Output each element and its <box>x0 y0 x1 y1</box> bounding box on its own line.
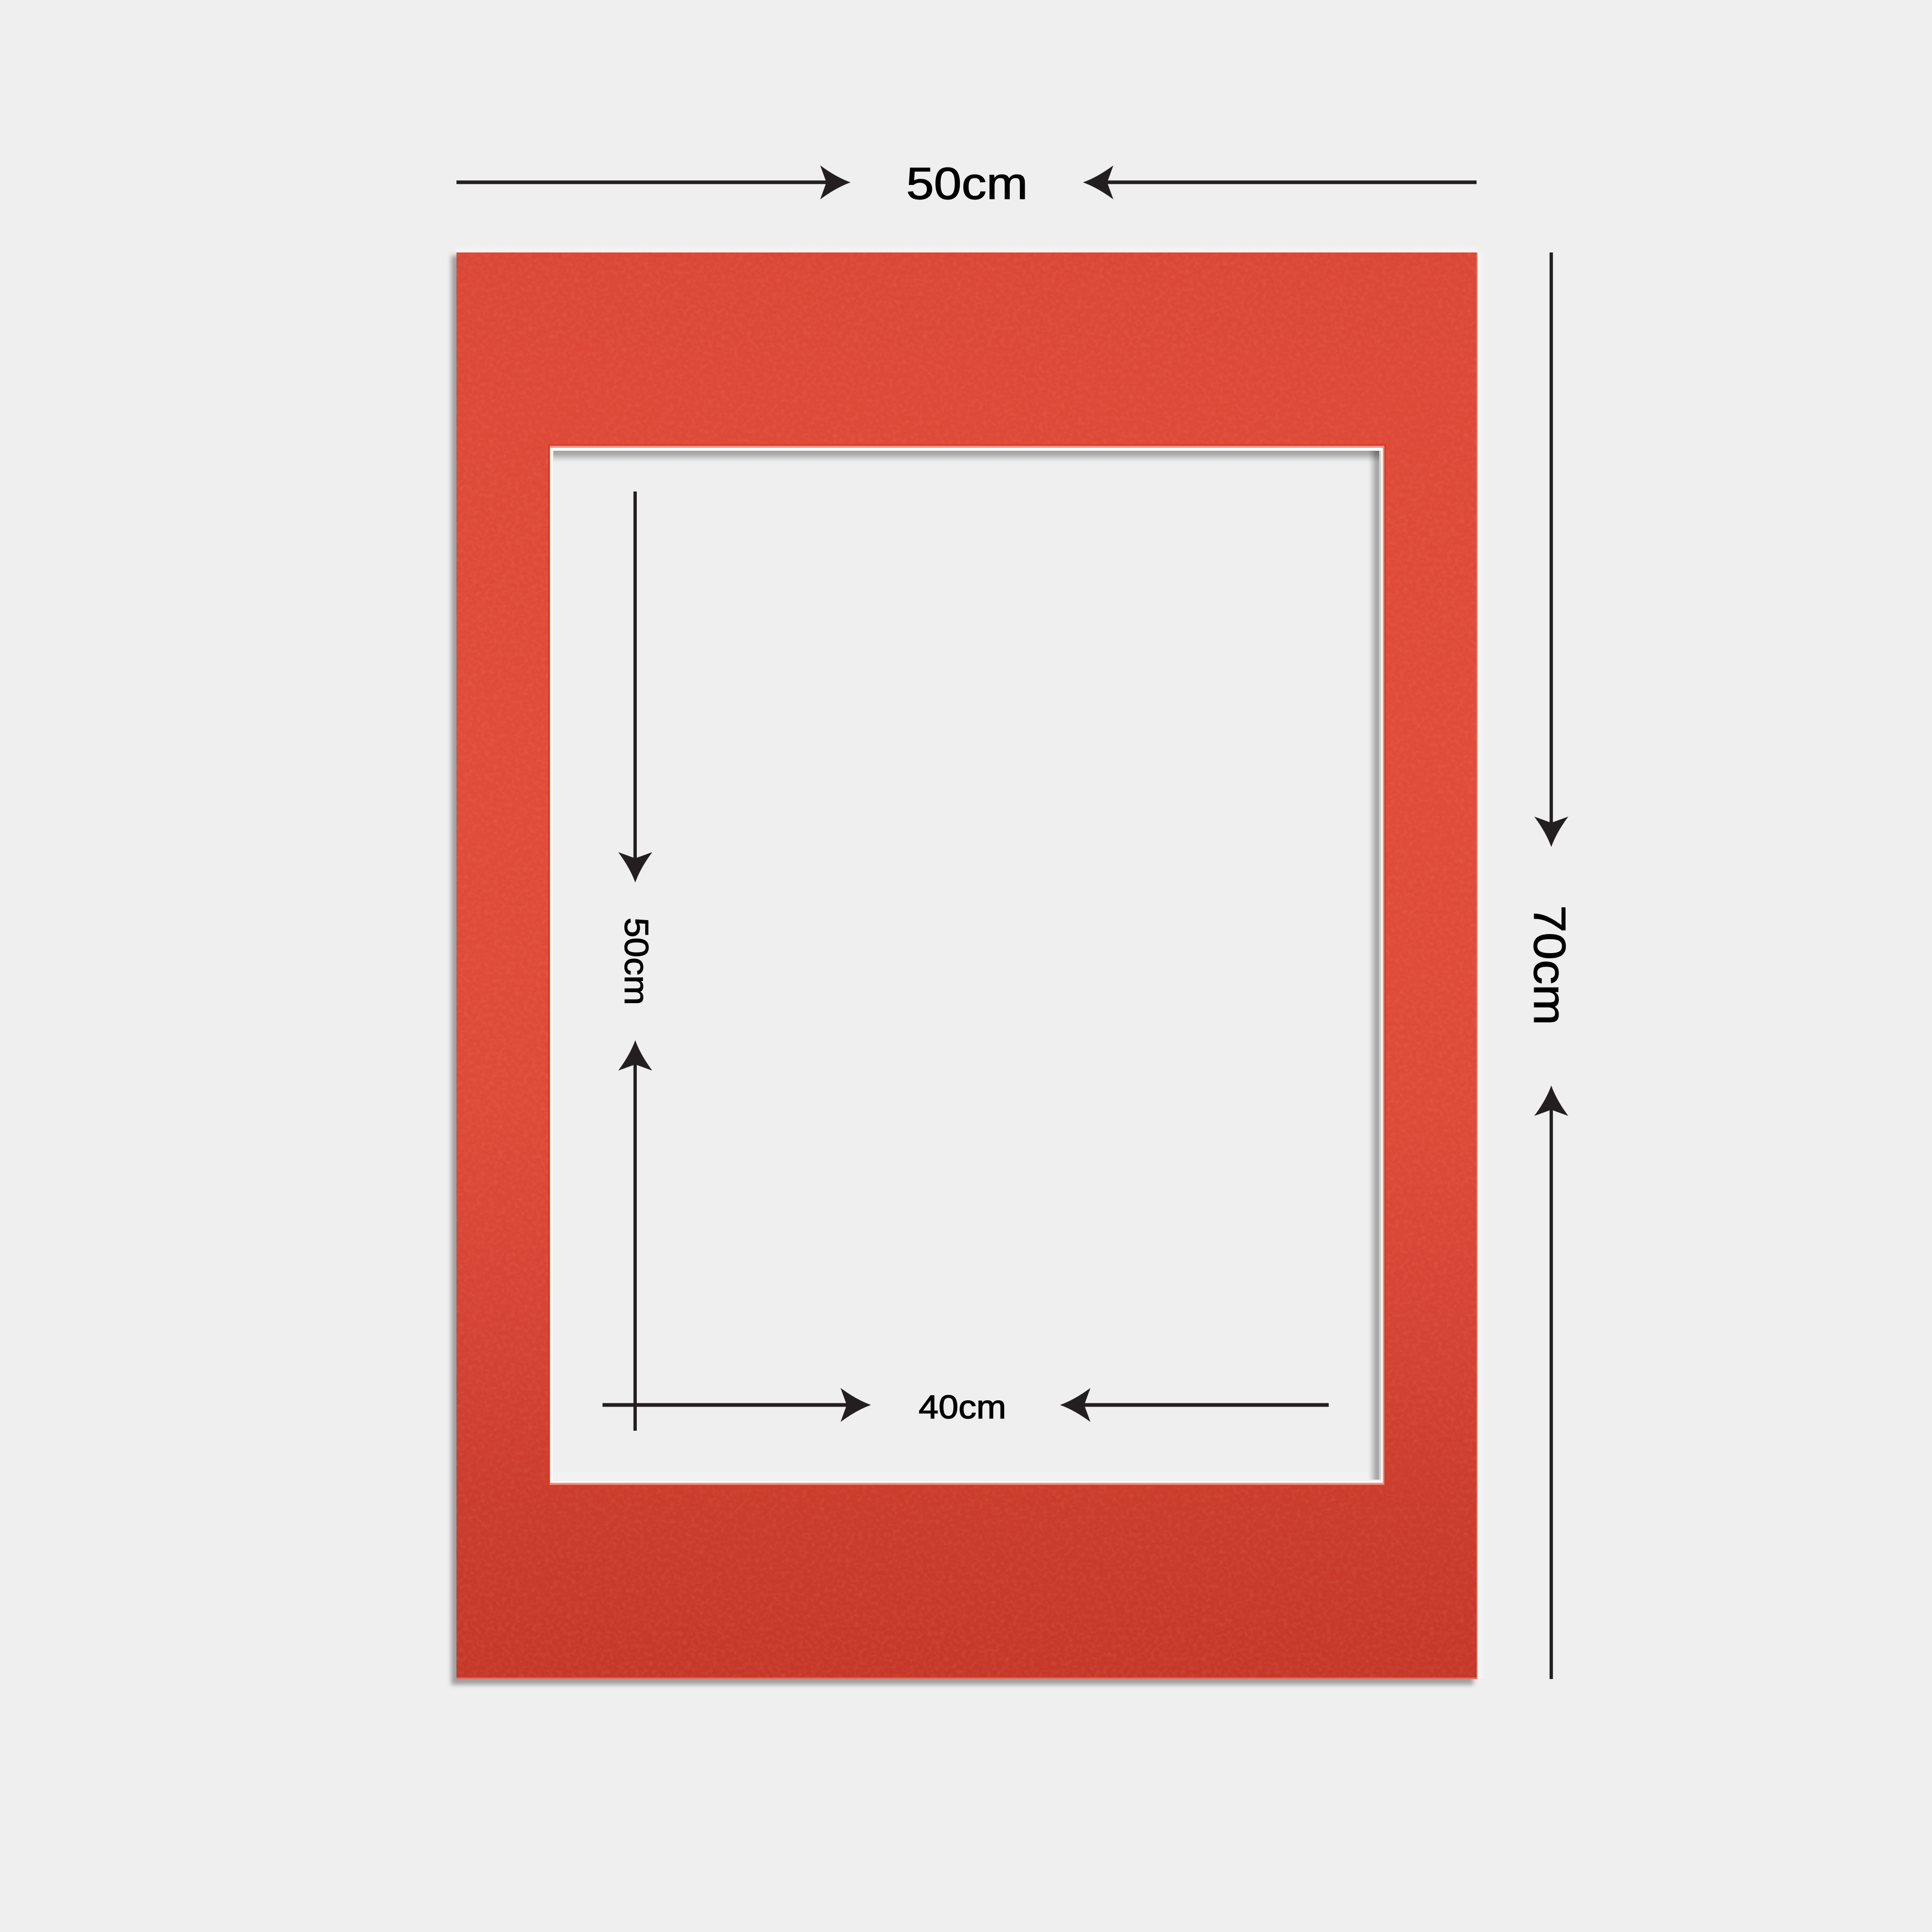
arrow: window width, left <box>603 1388 871 1422</box>
red mount board <box>456 252 1478 1679</box>
window opening <box>553 450 1381 1481</box>
board light halo <box>456 245 1486 1679</box>
label: window width 40cm: 40cm <box>919 1388 1006 1426</box>
board drop shadow <box>451 256 1473 1685</box>
window bevel <box>548 444 1386 1486</box>
arrow: window width, right <box>1060 1388 1329 1422</box>
label: window height 50cm: 50cm <box>618 918 655 1005</box>
label: outer height 70cm: 70cm <box>1524 905 1574 1025</box>
arrow: outer height, bottom <box>1534 1086 1568 1679</box>
arrow: outer height, top <box>1534 252 1568 847</box>
arrow: outer width, right <box>1083 165 1477 199</box>
infographic canvas <box>448 165 1568 1688</box>
arrow: window height, bottom <box>618 1040 652 1431</box>
arrow: window height, top <box>618 492 652 883</box>
arrow: outer width, left <box>456 165 851 199</box>
label: outer width 50cm: 50cm <box>906 159 1028 209</box>
mount board with window <box>451 245 1486 1685</box>
